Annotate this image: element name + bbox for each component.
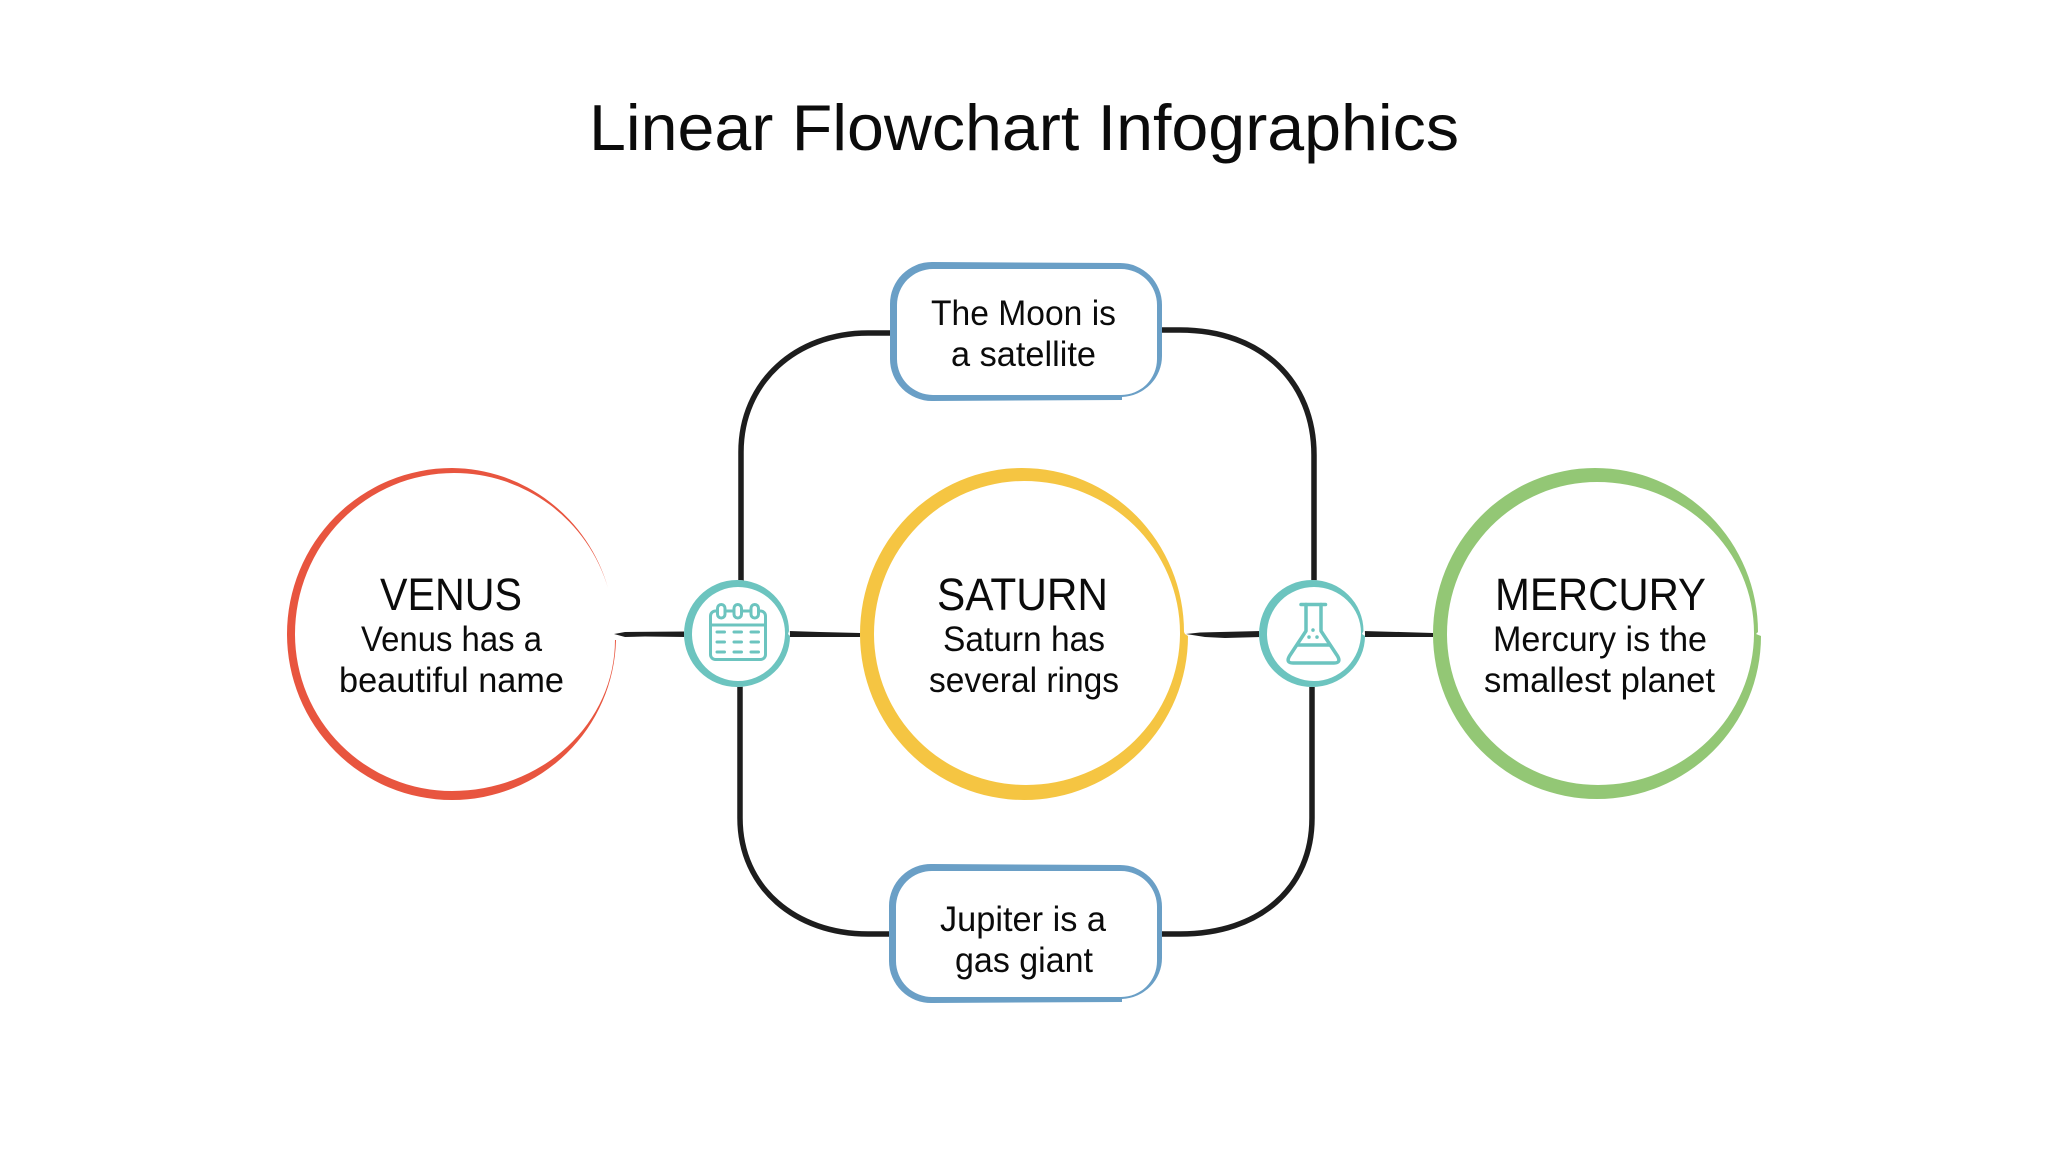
connector: upper left curve xyxy=(741,333,890,582)
circle: Mercury xyxy=(1433,468,1761,799)
connector: flask to Mercury xyxy=(1363,631,1433,637)
connector: Saturn to flask xyxy=(1186,631,1261,638)
text: Venus description: beautiful name xyxy=(339,661,564,700)
text: Saturn description: several rings xyxy=(929,661,1119,700)
text: Saturn description xyxy=(929,620,1119,700)
circle: Venus xyxy=(287,468,616,800)
text: Jupiter label xyxy=(940,900,1107,980)
box: Jupiter xyxy=(889,864,1162,1003)
text: Mercury description: smallest planet xyxy=(1484,661,1715,700)
text: Moon label: The Moon is xyxy=(931,294,1116,333)
connector: upper right curve xyxy=(1162,330,1314,582)
text: Mercury description: Mercury is the xyxy=(1493,620,1707,659)
text: Jupiter label: Jupiter is a xyxy=(940,900,1107,939)
circle: Saturn xyxy=(860,468,1188,800)
text: Venus heading: VENUS xyxy=(380,569,522,620)
title: Linear Flowchart Infographics xyxy=(589,91,1459,164)
text: Moon label: a satellite xyxy=(951,335,1096,374)
box: The Moon xyxy=(890,262,1162,401)
icon: calendar in teal circle xyxy=(684,580,790,687)
connector: calendar to Saturn xyxy=(789,631,860,637)
text: Venus description: Venus has a xyxy=(361,620,542,659)
text: Saturn description: Saturn has xyxy=(943,620,1105,659)
connector: lower right curve xyxy=(1162,685,1312,934)
text: Venus description xyxy=(339,620,564,700)
text: Moon label xyxy=(931,294,1116,374)
icon: flask in teal circle xyxy=(1259,580,1365,687)
text: Jupiter label: gas giant xyxy=(955,941,1093,980)
text: Saturn heading: SATURN xyxy=(937,569,1108,620)
text: Mercury heading: MERCURY xyxy=(1495,569,1706,620)
text: Mercury description xyxy=(1484,620,1715,700)
connector: Venus to calendar xyxy=(614,632,686,637)
connector: lower left curve xyxy=(740,685,890,934)
